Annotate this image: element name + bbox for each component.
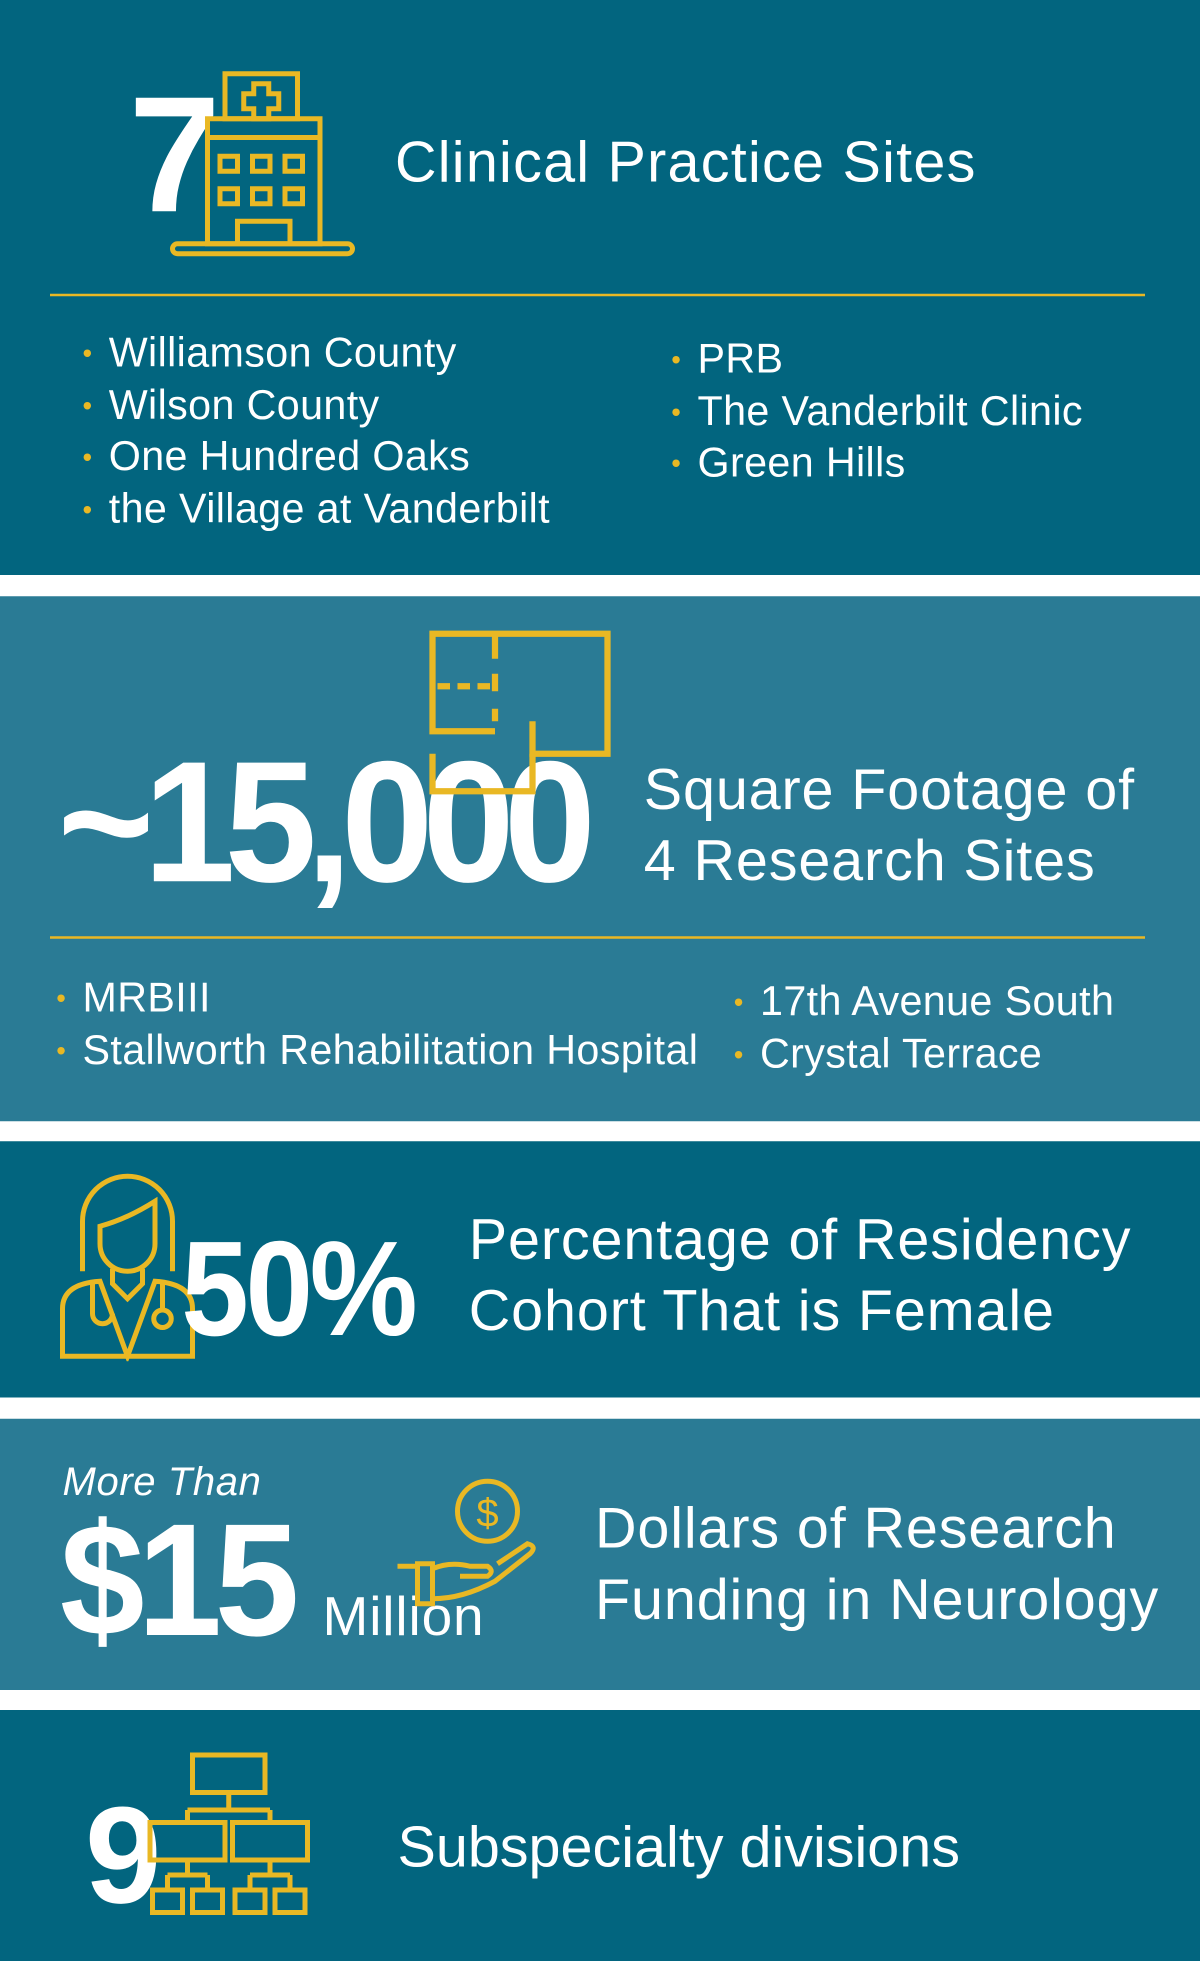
bullet list right: PRB bbox=[698, 335, 783, 381]
bullet list left: • bbox=[56, 1035, 66, 1066]
bullet list right: • bbox=[671, 396, 681, 427]
bullet list left: • bbox=[56, 982, 66, 1014]
bullet list right: • bbox=[734, 1038, 744, 1070]
heading: Square Footage of bbox=[644, 756, 1135, 821]
big number 9: 9 bbox=[85, 1779, 161, 1932]
bullet list right bbox=[671, 335, 1083, 485]
heading: Clinical Practice Sites bbox=[395, 129, 977, 194]
icon: female doctor bbox=[60, 1174, 195, 1362]
bullet list left: Wilson County bbox=[109, 381, 380, 427]
heading bbox=[644, 756, 1135, 892]
heading: Funding in Neurology bbox=[595, 1566, 1159, 1631]
bullet list right: • bbox=[671, 448, 681, 479]
big number $15: $15 bbox=[60, 1491, 292, 1670]
bullet list left bbox=[82, 329, 550, 531]
label million: Million bbox=[322, 1586, 485, 1648]
bullet list right: • bbox=[671, 344, 681, 375]
panel: research funding bbox=[0, 1419, 1200, 1690]
icon: floor plan bbox=[429, 630, 611, 794]
label more than: More Than bbox=[62, 1459, 262, 1504]
bullet list left: • bbox=[82, 338, 93, 369]
bullet list left: • bbox=[82, 442, 93, 473]
panel: clinical practice sites bbox=[0, 0, 1200, 575]
bullet list right: • bbox=[734, 986, 744, 1018]
heading bbox=[469, 1206, 1131, 1342]
bullet list left bbox=[56, 974, 698, 1072]
panel: residency female bbox=[0, 1141, 1200, 1398]
bullet list right: Green Hills bbox=[698, 439, 906, 485]
bullet list right: The Vanderbilt Clinic bbox=[698, 387, 1083, 433]
big number 15,000: ~15,000 bbox=[58, 726, 585, 919]
heading bbox=[595, 1495, 1159, 1631]
heading: Subspecialty divisions bbox=[398, 1814, 960, 1879]
big number 7: 7 bbox=[129, 62, 216, 246]
bullet list left: One Hundred Oaks bbox=[109, 433, 470, 479]
panel: research square footage bbox=[0, 596, 1200, 1121]
icon: hospital building bbox=[170, 71, 355, 256]
bullet list left: • bbox=[82, 390, 93, 421]
heading: 4 Research Sites bbox=[644, 828, 1096, 892]
heading: Cohort That is Female bbox=[469, 1278, 1055, 1342]
bullet list left: MRBIII bbox=[82, 974, 211, 1020]
heading: Percentage of Residency bbox=[469, 1206, 1131, 1271]
bullet list right bbox=[734, 978, 1114, 1076]
panel: subspecialty divisions bbox=[0, 1710, 1200, 1961]
bullet list right: Crystal Terrace bbox=[760, 1030, 1042, 1076]
bullet list left: • bbox=[82, 494, 93, 525]
bullet list left: Williamson County bbox=[109, 329, 457, 375]
bullet list left: Stallworth Rehabilitation Hospital bbox=[82, 1026, 698, 1072]
bullet list left: the Village at Vanderbilt bbox=[109, 485, 550, 531]
icon: hand with coin: $ bbox=[476, 1491, 499, 1535]
big number 50%: 50% bbox=[181, 1212, 414, 1364]
bullet list right: 17th Avenue South bbox=[760, 978, 1114, 1024]
icon: org chart bbox=[148, 1752, 310, 1915]
heading: Dollars of Research bbox=[595, 1495, 1117, 1560]
icon: hand with coin bbox=[398, 1478, 536, 1606]
